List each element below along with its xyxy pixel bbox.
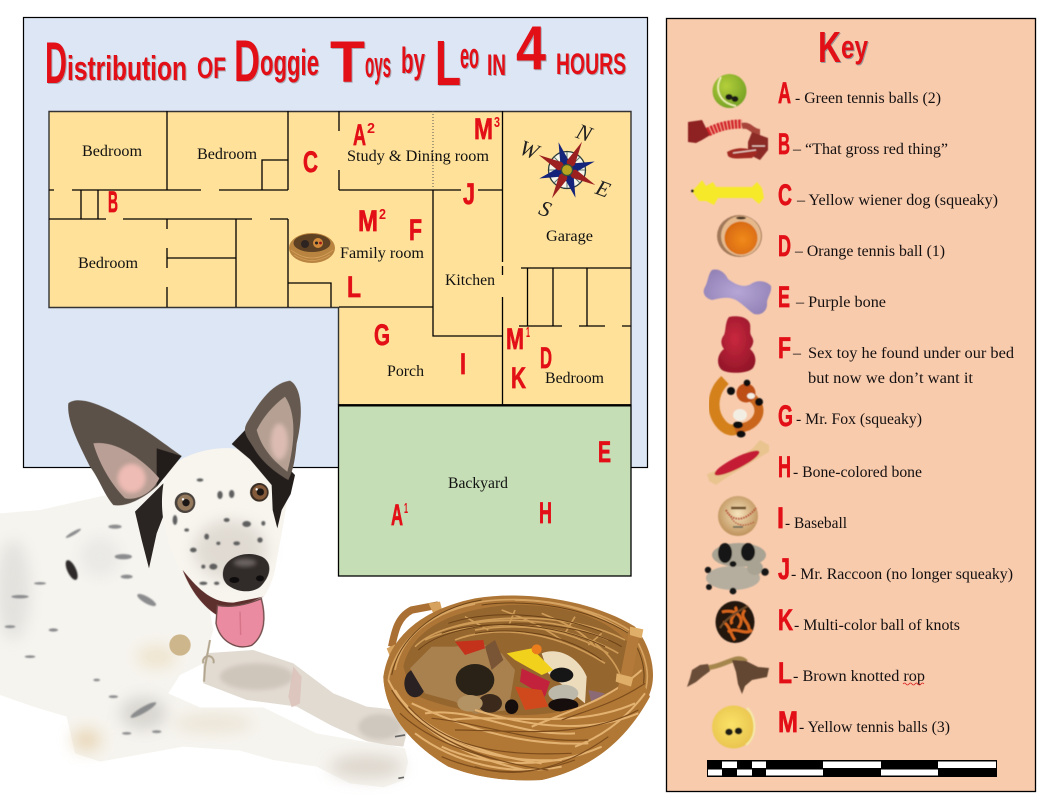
map letter markers: C	[303, 146, 318, 179]
key: letter L: - Brown knotted rop	[793, 668, 925, 685]
key: letter E: E	[778, 281, 790, 314]
room labels: Garage	[546, 228, 593, 245]
interior	[403, 605, 634, 715]
map letter markers: 1	[404, 500, 408, 517]
key: letter A	[778, 77, 941, 110]
eyes	[175, 483, 269, 513]
key: letter C: – Yellow wiener dog (squeaky)	[796, 192, 998, 209]
map letter markers: 1	[526, 324, 530, 341]
map letter markers: B	[108, 186, 118, 219]
muzzle shading	[193, 520, 267, 580]
map letter markers: E	[598, 436, 611, 469]
front weave	[388, 670, 645, 770]
key: letter H	[778, 451, 922, 484]
key: letter F: F	[778, 332, 791, 365]
body	[0, 477, 408, 787]
map letter markers: H	[539, 497, 552, 530]
icon: yellow tennis ball	[712, 706, 755, 748]
tongue	[216, 599, 264, 647]
key: letter D: – Orange tennis ball (1)	[794, 243, 945, 260]
key heading: K	[818, 23, 841, 72]
backyard	[338, 405, 631, 576]
room labels: Kitchen	[445, 272, 495, 289]
floor plan	[49, 111, 631, 576]
map letter markers: G	[374, 319, 390, 352]
icon: knot ball	[716, 601, 754, 643]
handle right	[623, 630, 635, 690]
key: letter C: C	[778, 179, 792, 212]
head speckles	[173, 478, 265, 585]
icon: compass rose: N	[572, 118, 597, 147]
key: letter B: – “That gross red thing”	[792, 141, 948, 158]
icon: red rubber toy	[718, 316, 755, 373]
body shading	[0, 537, 403, 779]
ear right	[245, 381, 301, 480]
toys in basket	[404, 640, 605, 714]
far leg wrap	[288, 667, 302, 707]
map letter markers: A	[353, 119, 366, 152]
illustration: basket of toys	[383, 595, 653, 780]
key: letter G: G	[778, 400, 793, 433]
house floor	[49, 112, 631, 405]
title: L	[435, 27, 461, 99]
key: letter H: - Bone-colored bone	[793, 464, 922, 481]
icon: brown knotted rope	[687, 659, 769, 694]
key: letter G: - Mr. Fox (squeaky)	[796, 411, 922, 428]
key: letter A: - Green tennis balls (2)	[795, 90, 941, 107]
basket body	[383, 595, 653, 780]
key: letter J: J	[778, 553, 790, 586]
nose	[223, 554, 269, 591]
icon: yellow wiener dog	[691, 180, 764, 205]
icon: compass rose	[516, 118, 614, 222]
collar tags	[169, 634, 191, 656]
map letter markers: M	[358, 205, 378, 238]
icon: red rope toy	[688, 120, 768, 160]
key: letter F	[778, 332, 1014, 387]
key: letter F: but now we don’t want it	[808, 370, 974, 387]
key: letter A: A	[778, 77, 791, 110]
key: letter J: - Mr. Raccoon (no longer squeaky)	[791, 566, 1013, 583]
panel: key	[666, 18, 1036, 792]
key: letter I: - Baseball	[785, 515, 848, 532]
icon: green tennis ball	[712, 74, 746, 108]
handle left	[392, 605, 438, 647]
title: T	[330, 30, 365, 95]
icon: compass rose: E	[592, 174, 614, 203]
title	[45, 14, 626, 99]
icon: purple bone	[704, 269, 771, 314]
map letter markers: D	[540, 342, 552, 375]
key: letter G	[778, 400, 922, 433]
key: letter B	[778, 128, 948, 161]
title: istribution	[67, 50, 187, 88]
key: letter L: L	[778, 657, 792, 690]
key: letter M: M	[778, 706, 798, 739]
map letter markers: A	[391, 499, 403, 532]
icon: small basket on map	[289, 233, 335, 263]
key: letter K	[778, 604, 960, 637]
key: letter K: K	[778, 604, 793, 637]
map letter markers: J	[463, 178, 475, 211]
head	[162, 448, 287, 606]
key: letter B: B	[778, 128, 790, 161]
key: letter J	[778, 553, 1013, 586]
body spots	[5, 525, 161, 735]
map letter markers	[108, 113, 611, 532]
icon: mr fox	[714, 380, 763, 438]
title: by	[401, 40, 425, 81]
key: letter I	[777, 502, 848, 535]
icon: baseball	[718, 496, 758, 536]
map letter markers: F	[409, 214, 422, 247]
far front leg	[203, 650, 407, 747]
room labels: Study & Dining room	[347, 148, 490, 165]
title: HOURS	[556, 48, 626, 81]
key: letter D	[778, 230, 945, 263]
gap between legs	[168, 675, 370, 743]
title: eo	[460, 35, 479, 76]
map letter markers: L	[347, 271, 361, 304]
scale bar	[707, 760, 997, 777]
map letter markers: I	[460, 348, 466, 381]
title: D	[234, 29, 260, 94]
map letter markers: K	[511, 362, 526, 395]
map letter markers: 2	[367, 120, 375, 137]
key: letter M	[778, 706, 950, 739]
map letter markers: 3	[494, 114, 500, 131]
room labels: Backyard	[448, 475, 508, 492]
key: letter F: –	[792, 345, 802, 362]
key: letter L	[778, 657, 925, 690]
room labels: Family room	[340, 245, 425, 262]
neck marking	[135, 483, 166, 568]
key: letter I: I	[777, 502, 784, 535]
title: OF	[197, 52, 226, 85]
room labels: Porch	[387, 363, 424, 380]
rear weave	[415, 610, 625, 680]
key: letter E	[778, 281, 886, 314]
title: D	[45, 31, 67, 96]
icon: bone-colored bone	[707, 440, 769, 485]
right head marking	[232, 427, 295, 528]
icon: orange tennis ball	[717, 215, 762, 257]
key: letter C	[778, 179, 998, 212]
title: oys	[365, 44, 391, 85]
rim strands	[388, 600, 647, 697]
front wall	[383, 673, 650, 780]
key: letter F: Sex toy he found under our bed	[808, 345, 1014, 362]
map letter markers: M	[506, 323, 524, 356]
room labels	[78, 143, 605, 492]
map letter markers: 2	[379, 206, 386, 223]
map letter markers: M	[474, 113, 493, 146]
icon: mr raccoon	[705, 543, 769, 594]
icon: compass rose: W	[516, 135, 544, 165]
room labels: Bedroom	[78, 255, 139, 272]
panel: map background	[24, 18, 648, 468]
paw toes	[395, 735, 405, 778]
illustration: dog	[0, 381, 408, 787]
title: oggie	[260, 42, 319, 83]
key: letter K: - Multi-color ball of knots	[794, 617, 960, 634]
room labels: Bedroom	[545, 370, 605, 387]
key heading	[818, 23, 868, 72]
room labels: Bedroom	[82, 143, 143, 160]
title: 4	[516, 14, 546, 83]
room labels: Bedroom	[197, 146, 258, 163]
title: IN	[487, 49, 506, 82]
mouth	[183, 570, 263, 616]
key: letter H: H	[778, 451, 791, 484]
icon: compass rose: S	[536, 195, 555, 222]
key: letter E: – Purple bone	[795, 294, 886, 311]
key: letter D: D	[778, 230, 791, 263]
key: letter M: - Yellow tennis balls (3)	[799, 719, 950, 736]
ear left	[68, 400, 182, 505]
key heading: ey	[841, 29, 868, 65]
